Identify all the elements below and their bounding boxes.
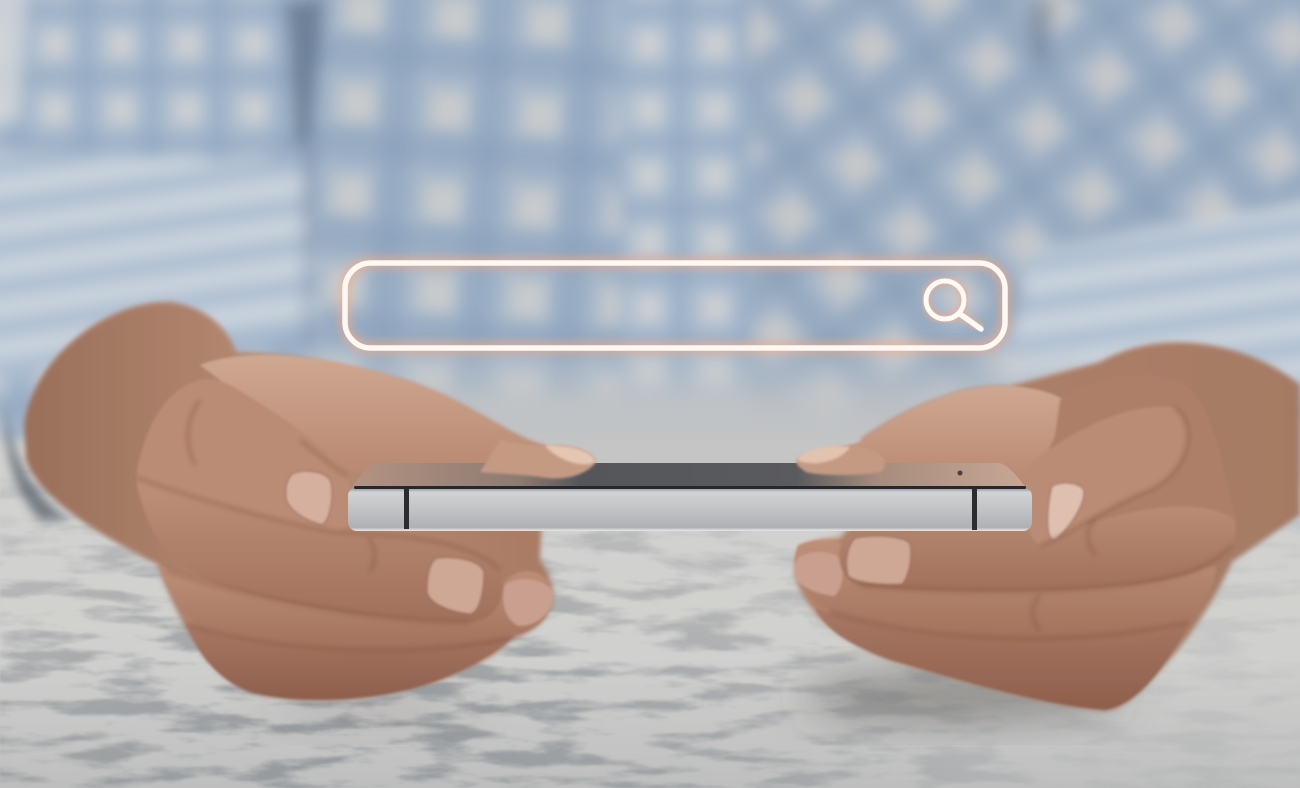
torso fading into the table	[300, 340, 1080, 470]
back of right hand	[1050, 375, 1236, 525]
right middle finger	[839, 493, 1236, 591]
phone screen seen edge-on	[352, 463, 1026, 488]
left fingertip nail highlight	[545, 446, 595, 464]
left middle finger	[136, 478, 503, 622]
right thumb	[1025, 407, 1188, 545]
smartphone	[348, 463, 1032, 531]
shadows cast on the table	[260, 673, 1120, 718]
glowing search bar	[345, 263, 1005, 348]
left antenna band	[404, 489, 409, 529]
right fingertip over phone	[796, 446, 885, 475]
left middle fingernail	[427, 558, 484, 614]
left thumb	[136, 379, 351, 532]
left fingertip over phone	[480, 440, 596, 479]
right finger creases	[830, 408, 1232, 639]
left ring finger	[158, 565, 552, 653]
left finger creases	[136, 400, 510, 650]
sleeve shadow under left forearm	[5, 400, 70, 520]
phone metal band	[348, 487, 1032, 531]
right antenna band	[972, 489, 977, 530]
right middle fingernail	[846, 536, 911, 585]
left ring fingernail	[503, 579, 553, 626]
left pinky finger	[185, 622, 515, 700]
left hand and forearm	[24, 302, 553, 700]
right ring finger	[795, 539, 1216, 647]
background: wooden table	[0, 440, 1300, 788]
right pinky finger	[815, 608, 1190, 710]
left thumbnail	[286, 471, 332, 525]
front camera dot	[958, 470, 962, 476]
right hand and forearm	[794, 342, 1300, 711]
icon: magnifying glass	[926, 281, 981, 329]
right index finger	[840, 386, 1070, 488]
right hand silhouette and forearm	[795, 342, 1300, 711]
right thumbnail	[1048, 483, 1084, 540]
phone top edge line	[354, 486, 1026, 489]
left hand silhouette and forearm	[24, 302, 553, 700]
search bar outline	[345, 263, 1005, 348]
left index finger	[200, 355, 545, 478]
background: blurred plaid shirt	[0, 0, 1300, 480]
right fingertip nail highlight	[797, 446, 850, 463]
search bar glow	[345, 263, 1005, 348]
right ring fingernail	[794, 552, 843, 596]
